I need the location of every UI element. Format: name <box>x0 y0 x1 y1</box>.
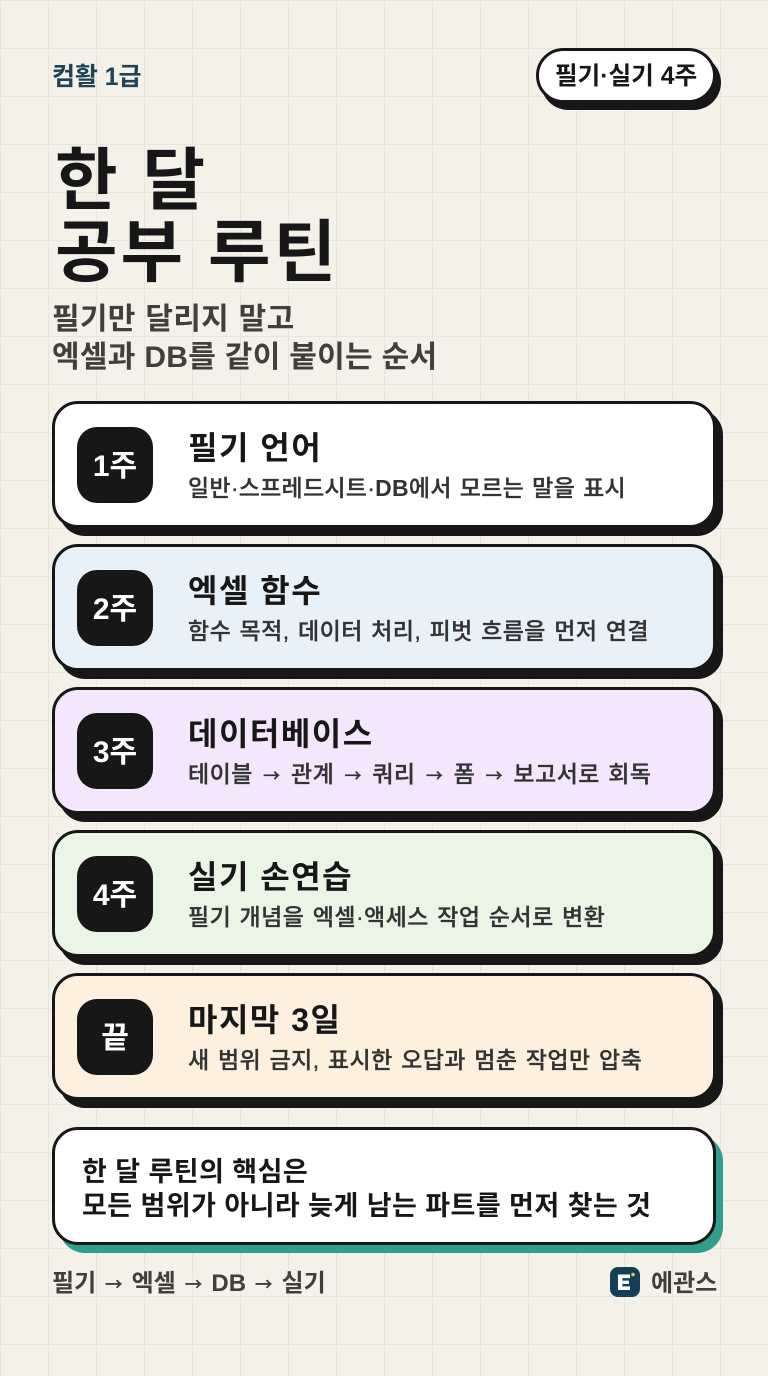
text: last days description: 새 범위 금지, 표시한 오답과 멈춘 작업만 압축 <box>188 1047 642 1073</box>
callout text: 모든 범위가 아니라 늦게 남는 파트를 먼저 찾는 것 <box>82 1191 651 1221</box>
badge: 2주 <box>77 570 153 646</box>
badge: 1주 <box>77 427 153 503</box>
text: week 1 description: 일반·스프레드시트·DB에서 모르는 말을 표시 <box>188 475 626 501</box>
heading: 데이터베이스: 데이터베이스 <box>188 716 374 752</box>
footer flow text: 필기 → 엑셀 → DB → 실기 <box>52 1270 326 1297</box>
brand name: 에관스 <box>651 1270 717 1297</box>
callout: key message <box>52 1127 716 1245</box>
badge: 4주 <box>77 856 153 932</box>
title <box>55 143 339 291</box>
heading: 마지막 3일: 마지막 3일 <box>188 1002 341 1038</box>
icon: brand logo <box>610 1267 640 1297</box>
badge: 끝 <box>77 999 153 1075</box>
badge: 3주 <box>77 713 153 789</box>
heading: 엑셀 함수: 엑셀 함수 <box>188 573 322 609</box>
panel: week 4 <box>52 830 716 957</box>
heading: 필기 언어: 필기 언어 <box>188 430 322 466</box>
heading: 실기 손연습: 실기 손연습 <box>188 859 353 895</box>
badge: 4주: 4주 <box>93 879 137 912</box>
panel: week 2 <box>52 544 716 671</box>
badge: 2주: 2주 <box>93 593 137 626</box>
text: week 3 description: 테이블 → 관계 → 쿼리 → 폼 → 보고서로 회독 <box>188 761 651 787</box>
panel: week 3 <box>52 687 716 814</box>
badge: 1주: 1주 <box>93 450 137 483</box>
category label: 컴활 1급 <box>52 63 141 91</box>
duration pill <box>536 48 716 103</box>
title: 한 달 <box>55 143 208 219</box>
text: week 2 description: 함수 목적, 데이터 처리, 피벗 흐름을 먼저 연결 <box>188 618 649 644</box>
badge: 끝: 끝 <box>101 1022 129 1055</box>
text: week 4 description: 필기 개념을 엑셀·액세스 작업 순서로 변환 <box>188 904 605 930</box>
panel: last 3 days <box>52 973 716 1100</box>
callout text: 한 달 루틴의 핵심은 <box>82 1157 308 1187</box>
callout text <box>82 1157 651 1221</box>
panel: week 1 <box>52 401 716 528</box>
title: 공부 루틴 <box>55 215 339 291</box>
subtitle: 엑셀과 DB를 같이 붙이는 순서 <box>52 341 437 374</box>
badge: 3주: 3주 <box>93 736 137 769</box>
duration pill: 필기·실기 4주 <box>555 63 697 90</box>
subtitle: 필기만 달리지 말고 <box>52 303 294 336</box>
subtitle <box>52 303 437 374</box>
